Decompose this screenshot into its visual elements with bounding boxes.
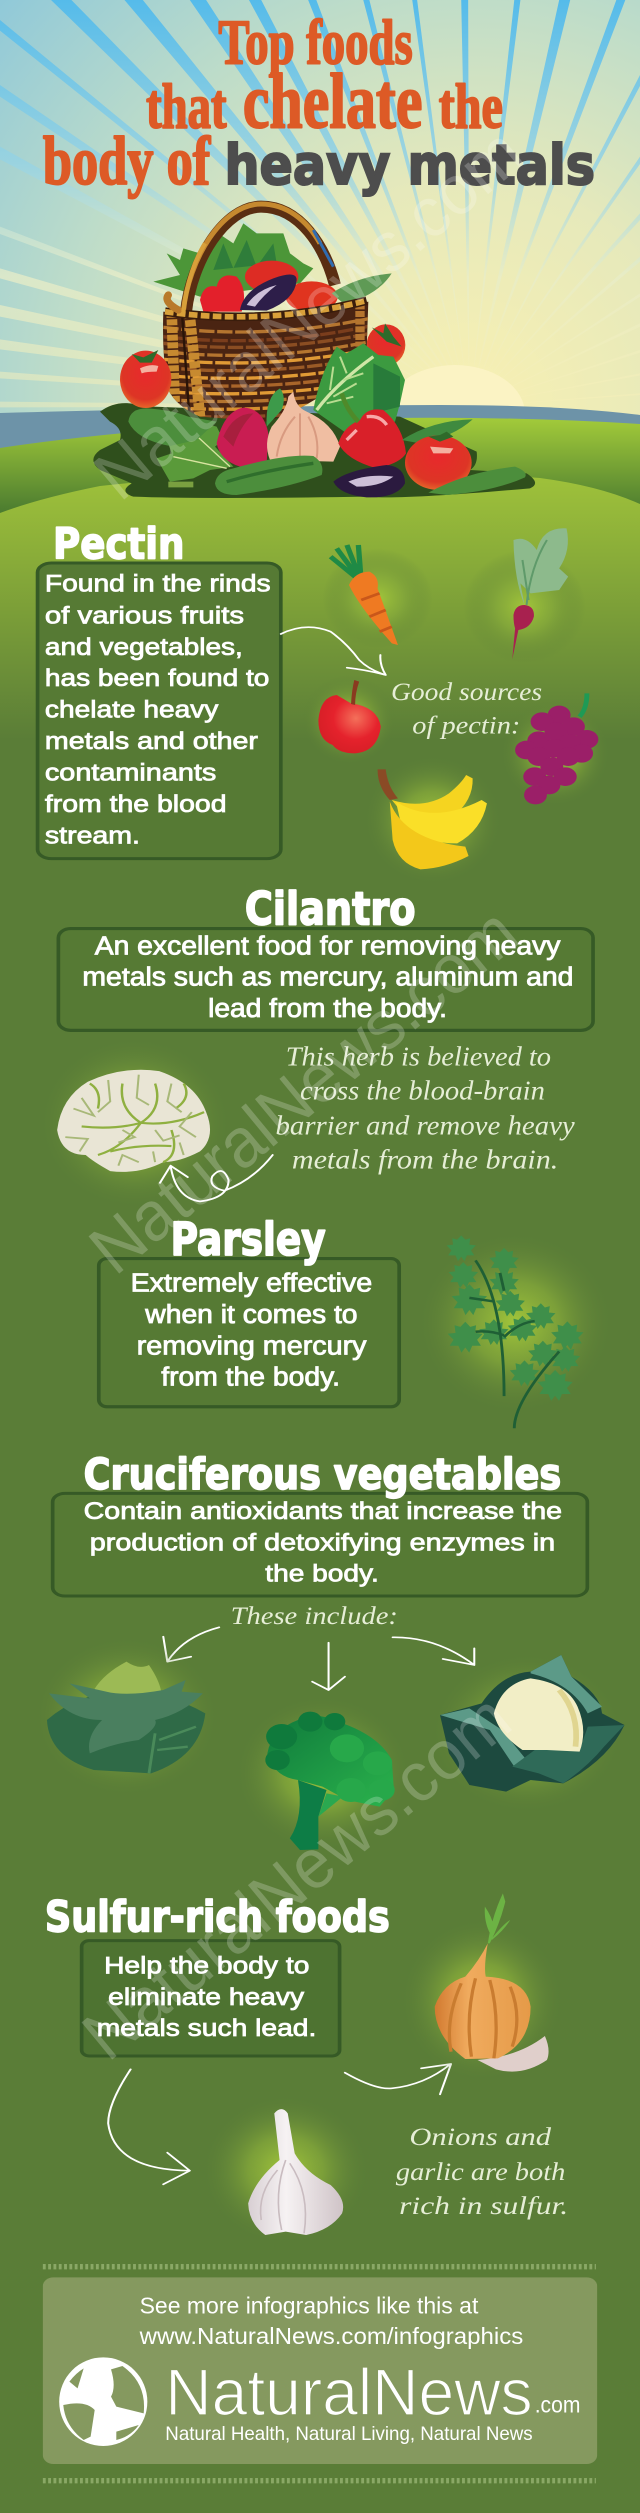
onion — [267, 392, 340, 462]
text box: Cruciferous description: the body. — [265, 1560, 379, 1587]
text: herb crosses blood-brain barrier: This herb is believed to — [286, 1042, 551, 1072]
text box: Sulfur description: Help the body to — [104, 1952, 309, 1979]
vegetable basket illustration — [93, 204, 535, 498]
text box: Cilantro description: lead from the body. — [208, 994, 447, 1022]
text: herb crosses blood-brain barrier: metals from the brain. — [292, 1145, 558, 1175]
title: the — [439, 72, 503, 142]
arrow to broccoli — [312, 1643, 345, 1690]
arrow to cauliflower — [393, 1637, 474, 1665]
text box: Sulfur description: eliminate heavy — [108, 1984, 305, 2010]
watermark 2: NaturalNews.com — [75, 893, 532, 1289]
cilantro section — [39, 882, 593, 1209]
arrow to cabbage — [163, 1627, 219, 1662]
icon: radish — [463, 528, 586, 663]
text box: Pectin description: contaminants — [45, 759, 216, 786]
text box: Pectin description: metals and other — [45, 728, 258, 754]
heading: Parsley: Parsley — [171, 1212, 326, 1266]
text box: Parsley description: removing mercury — [137, 1331, 367, 1360]
icon: parsley sprig — [417, 1232, 613, 1428]
text box: Pectin description: from the blood — [45, 791, 227, 817]
text box: Pectin description: chelate heavy — [45, 696, 219, 723]
text: herb crosses blood-brain barrier: cross the blood-brain — [300, 1076, 545, 1106]
title: body of — [43, 123, 211, 199]
icon: cabbage — [35, 1637, 218, 1797]
arrow to brain — [160, 1155, 273, 1201]
watermark 1: NaturalNews.com — [80, 113, 537, 514]
parsley section — [99, 1212, 613, 1428]
logo wordmark: NaturalNews — [165, 2355, 533, 2429]
leaf right — [402, 419, 473, 443]
text box: Cruciferous description — [53, 1493, 587, 1596]
ground shadow — [93, 403, 535, 498]
tomato behind basket — [367, 323, 405, 366]
eggplant — [333, 465, 405, 497]
text box: Cilantro description — [58, 929, 593, 1030]
lettuce — [313, 343, 405, 433]
text: good sources of pectin — [391, 679, 542, 740]
watermark 3: NaturalNews.com — [68, 1679, 525, 2075]
sun — [385, 365, 525, 463]
basket rim — [165, 301, 367, 317]
footer call to action: See more infographics like this at — [140, 2292, 479, 2319]
bell pepper — [338, 393, 406, 468]
text box: Cruciferous description: production of detoxifying enzymes in — [90, 1529, 555, 1556]
text: herb crosses blood-brain barrier — [276, 1042, 575, 1175]
logo wordmark: .com — [535, 2391, 580, 2418]
icon: garlic — [202, 2095, 369, 2245]
heading: Pectin: Pectin — [53, 520, 184, 569]
heading: Cilantro: Cilantro — [245, 882, 416, 936]
icon: broccoli — [235, 1695, 410, 1852]
icon: brain — [39, 1037, 231, 1209]
logo wordmark: Natural Health, Natural Living, Natural News — [165, 2422, 533, 2444]
text box: Parsley description — [99, 1259, 399, 1407]
footer call to action — [139, 2292, 523, 2349]
logo: globe — [59, 2357, 147, 2446]
basket handle — [186, 207, 335, 312]
left tomato — [120, 350, 171, 408]
hero scene: sky with sun rays and hills — [0, 0, 640, 520]
text: onions and garlic: Onions and — [409, 2124, 552, 2151]
cruciferous section — [35, 1451, 624, 1852]
text: herb crosses blood-brain barrier: barrier and remove heavy — [276, 1111, 575, 1141]
text box: Cilantro description: metals such as mercury, aluminum and — [82, 962, 573, 991]
beet — [217, 408, 268, 467]
title: Top foods — [218, 8, 413, 78]
basket body — [163, 302, 368, 422]
front zucchini — [215, 456, 322, 495]
pectin section — [38, 520, 610, 885]
icon: apple — [302, 675, 396, 765]
icon: grapes — [500, 693, 610, 807]
right zucchini — [428, 467, 526, 495]
text: onions and garlic — [396, 2124, 568, 2220]
sun rays — [0, 0, 640, 407]
text box: Parsley description: Extremely effective — [131, 1268, 372, 1297]
title: that — [146, 72, 227, 142]
footer call to action: www.NaturalNews.com/infographics — [139, 2323, 523, 2349]
text box: Sulfur description: metals such lead. — [97, 2015, 316, 2041]
text box: Sulfur description — [82, 1941, 340, 2056]
text: good sources of pectin: Good sources — [391, 679, 542, 706]
text box: Parsley description: from the body. — [161, 1362, 340, 1391]
left zucchini — [128, 408, 217, 446]
arrow to garlic — [108, 2069, 190, 2184]
text box: Pectin description: has been found to — [45, 665, 269, 691]
right tomato — [405, 432, 472, 490]
icon: onion with clove — [400, 1893, 563, 2082]
text: good sources of pectin: of pectin: — [412, 712, 520, 740]
title: chelate — [243, 58, 422, 145]
icon: cauliflower — [431, 1653, 624, 1813]
footer — [43, 2267, 597, 2481]
handle back leaves — [153, 223, 313, 297]
title — [43, 8, 595, 199]
icon: carrot — [322, 545, 433, 648]
back hill — [0, 418, 640, 520]
herb sprig — [157, 418, 233, 487]
text box: Pectin description: of various fruits — [45, 602, 244, 629]
footer panel — [43, 2277, 597, 2464]
text box: Pectin description: and vegetables, — [45, 634, 243, 660]
text: these include: These include: — [231, 1603, 398, 1630]
arrow to onion — [345, 2064, 451, 2094]
text box: Cilantro description: An excellent food for removing heavy — [95, 931, 561, 960]
horizon water band — [0, 405, 640, 480]
text box: Cruciferous description: Contain antioxidants that increase the — [84, 1498, 562, 1524]
text: onions and garlic: garlic are both — [396, 2159, 565, 2186]
text box: Pectin description: stream. — [45, 822, 140, 849]
text box: Pectin description: Found in the rinds — [45, 570, 271, 597]
sulfur section — [45, 1893, 568, 2245]
text box: Parsley description: when it comes to — [144, 1300, 358, 1328]
icon: bananas — [363, 755, 502, 885]
text box: Pectin description — [38, 563, 281, 859]
front hill fading into page background — [0, 472, 640, 760]
arrow to pectin sources — [281, 627, 386, 675]
heading: Sulfur-rich foods: Sulfur-rich foods — [45, 1893, 390, 1942]
text: onions and garlic: rich in sulfur. — [399, 2193, 568, 2220]
basket produce: tomato, pepper, eggplant — [245, 261, 298, 293]
